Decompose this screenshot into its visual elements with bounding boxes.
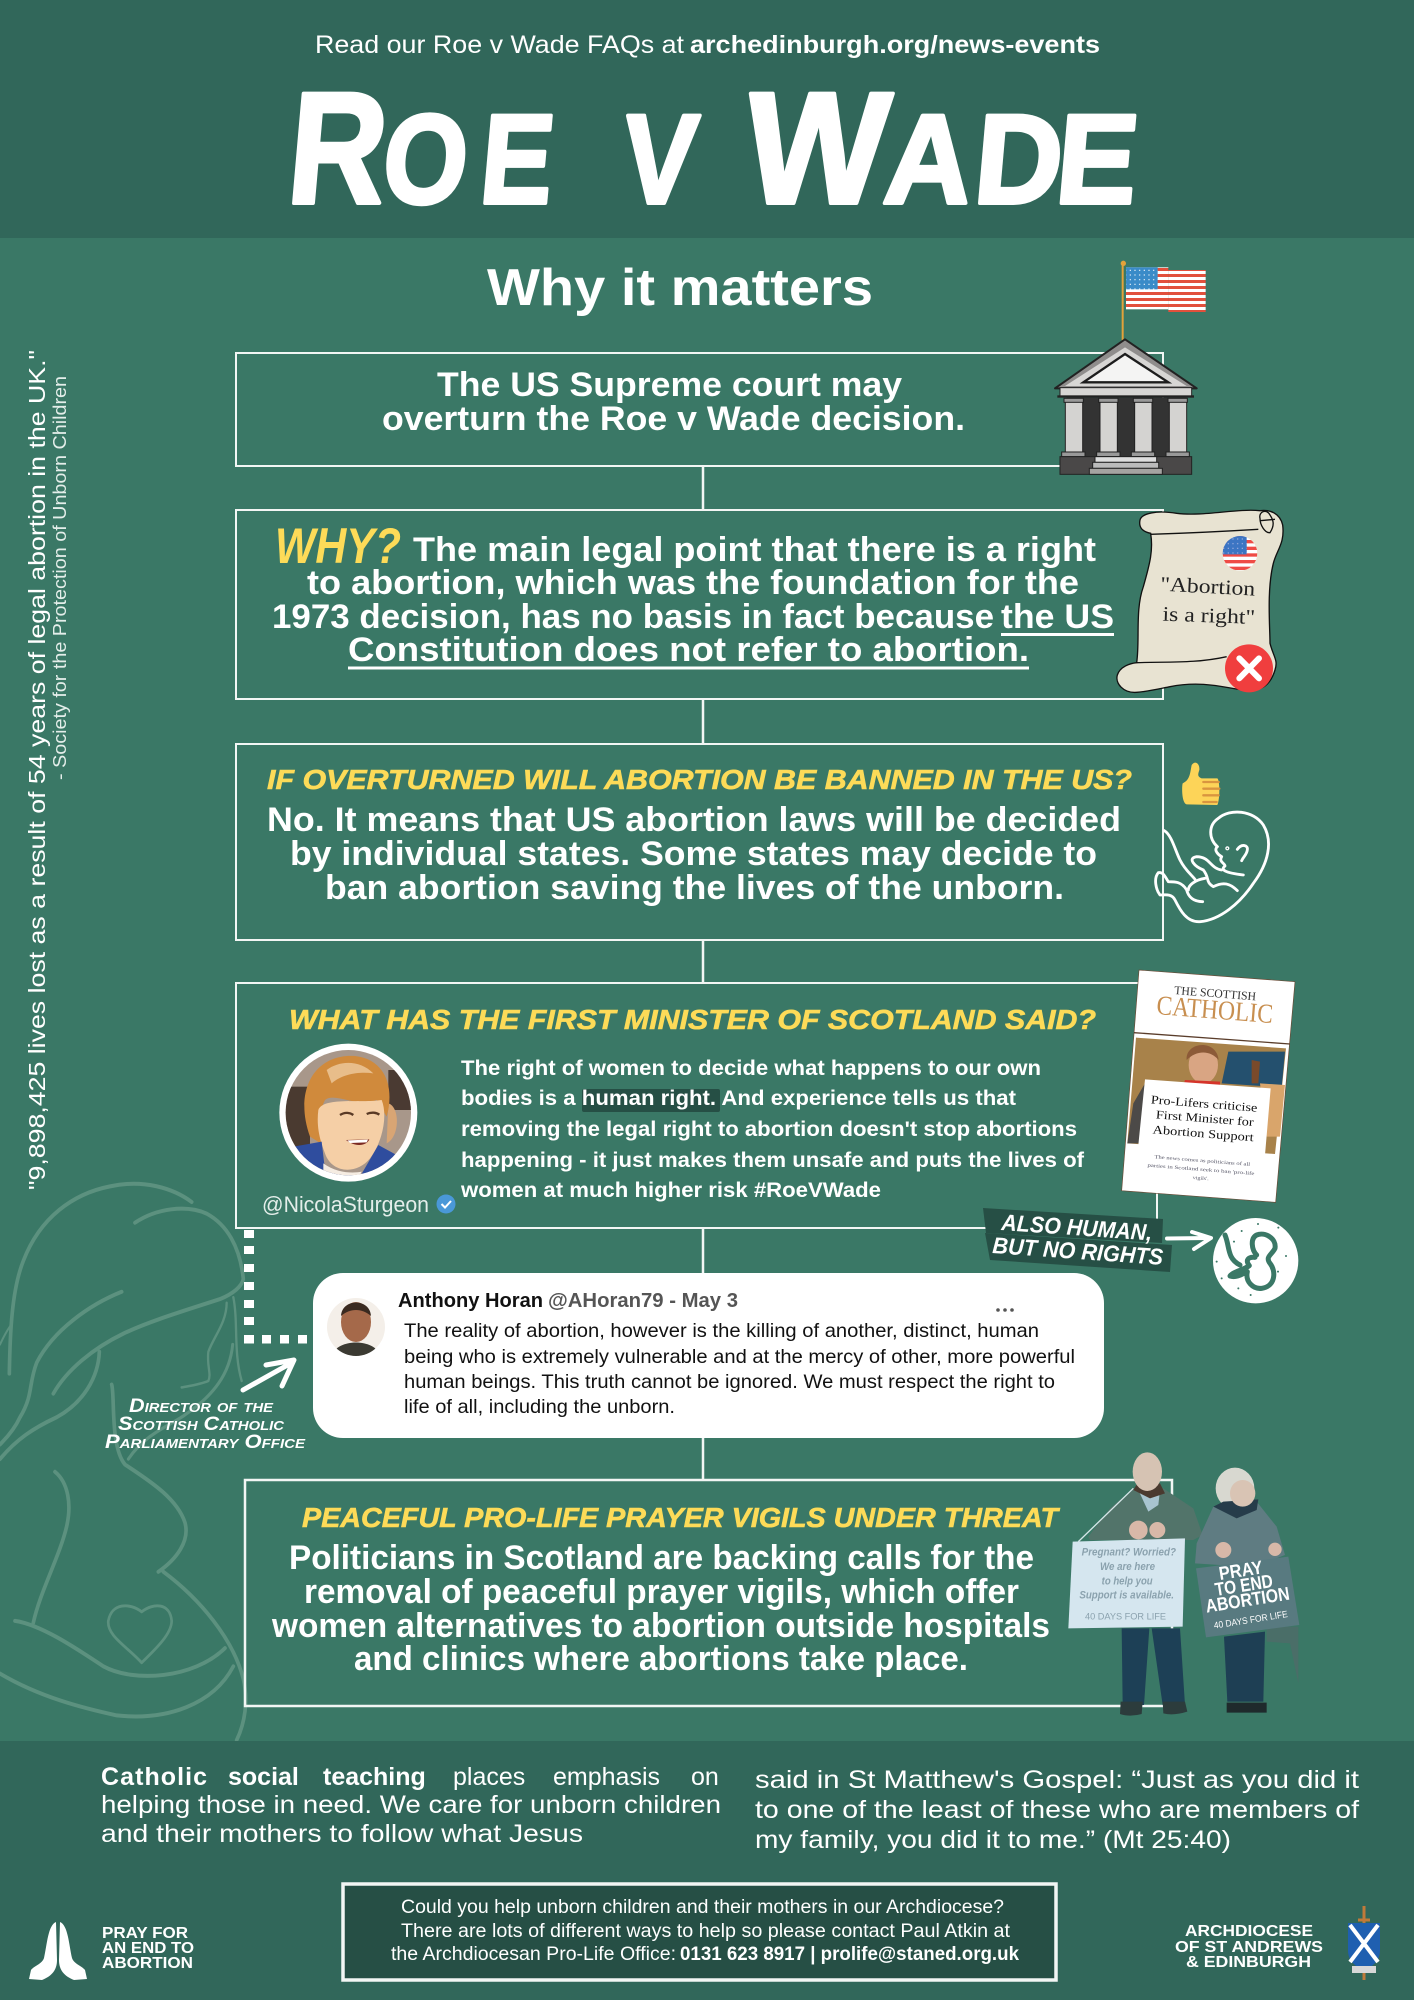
contact details: 0131 623 8917 | prolife@staned.org.uk: [680, 1944, 1019, 1965]
newspaper clipping: [1122, 970, 1295, 1202]
panel text line 1: No. It means that US abortion laws will be decided: [267, 801, 1121, 839]
contact line 3: the Archdiocesan Pro-Life Office:: [391, 1944, 676, 1965]
tweet line 1: The reality of abortion, however is the killing of another, distinct, human: [404, 1320, 1039, 1342]
sign pray line 1: PRAY: [1217, 1556, 1265, 1584]
side quote rotated: "9,898,425 lives lost as a result of 54 years of legal abortion in the UK.": [24, 350, 50, 1190]
twitter handle: @NicolaSturgeon: [262, 1192, 429, 1217]
dotted connector to tweet: [244, 1230, 307, 1344]
archdiocese line 3: & EDINBURGH: [1186, 1954, 1311, 1971]
panel text line 2: removal of peaceful prayer vigils, which offer: [304, 1573, 1019, 1611]
quote line 4: happening - it just makes them unsafe and puts the lives of: [461, 1149, 1085, 1172]
panel text line 1: The US Supreme court may: [437, 366, 902, 404]
icon: verified badge: [436, 1194, 456, 1214]
main title: [282, 59, 1147, 237]
headline line 2: First Minister for: [1155, 1107, 1254, 1129]
scroll text second line: is a right": [1162, 604, 1256, 629]
highlight: human right: [582, 1089, 720, 1112]
tweet line 2: being who is extremely vulnerable and at the mercy of other, more powerful: [404, 1346, 1075, 1368]
tweet card: Anthony Horan: [313, 1273, 1104, 1438]
photo cutout: two pro-life protesters with signs: [1068, 1452, 1299, 1716]
panel text line 4: and clinics where abortions take place.: [354, 1640, 968, 1678]
quote line 5: women at much higher risk #RoeVWade: [460, 1179, 881, 1202]
sign pray line 3: ABORTION: [1204, 1583, 1291, 1617]
caption: director title: [105, 1396, 305, 1453]
bottom band: [0, 1741, 1414, 2000]
underlines: [348, 634, 1114, 668]
article summary line 3: vigils'.: [1193, 1176, 1209, 1182]
sign text 2: We are here: [1100, 1561, 1155, 1573]
tweet menu dots: [996, 1308, 1014, 1312]
contact line 1: Could you help unborn children and their mothers in our Archdiocese?: [401, 1897, 1004, 1918]
teaching text column 1: Catholic: [101, 1763, 207, 1791]
tweet author: Anthony Horan: [398, 1290, 543, 1312]
icon: archdiocese crest: [1348, 1906, 1380, 1980]
why text line 4 underlined: Constitution does not refer to abortion.: [348, 631, 1029, 669]
archdiocese line 2: OF ST ANDREWS: [1175, 1939, 1323, 1956]
panel: why: [236, 510, 1163, 699]
headline line 1: Pro-Lifers criticise: [1150, 1092, 1258, 1115]
sign pray line 2: TO END: [1213, 1570, 1274, 1600]
pray line 2: AN END TO: [102, 1940, 194, 1957]
masthead small: THE SCOTTISH: [1174, 983, 1257, 1003]
why text line 1: The main legal point that there is a right: [413, 531, 1096, 569]
why label: WHY?: [275, 518, 401, 574]
pray line 1: PRAY FOR: [102, 1925, 188, 1942]
panel text line 2: overturn the Roe v Wade decision.: [382, 400, 965, 438]
quote line 2: bodies is a human right. And experience tells us that: [461, 1087, 1016, 1110]
tweet line 3: human beings. This truth cannot be ignored. We must respect the right to: [404, 1371, 1055, 1393]
pray line 3: ABORTION: [102, 1955, 193, 1972]
panel text line 3: women alternatives to abortion outside hospitals: [271, 1607, 1050, 1645]
archdiocese line 1: ARCHDIOCESE: [1185, 1923, 1313, 1940]
teaching text column 1: emphasis: [553, 1763, 660, 1791]
avatar: [327, 1298, 385, 1356]
callout: also human but no rights: [983, 1208, 1172, 1272]
line 2: to one of the least of these who are members of: [755, 1796, 1359, 1824]
icon: red cross badge: [1225, 644, 1273, 692]
panel: if overturned: [236, 744, 1163, 940]
teaching text column 1: [101, 1763, 721, 1848]
icon: praying hands: [29, 1922, 87, 1980]
why text underlined start: the US: [1001, 598, 1114, 636]
callout line 2: BUT NO RIGHTS: [992, 1232, 1165, 1270]
icon: courthouse with flag: [1055, 261, 1206, 474]
sign text 1: Pregnant? Worried?: [1082, 1547, 1176, 1559]
why text line 3: 1973 decision, has no basis in fact because: [272, 598, 994, 636]
connector lines: [702, 466, 704, 1480]
article summary line 2: parties in Scotland seek to ban 'pro-life: [1147, 1164, 1256, 1177]
teaching text column 1: social: [228, 1763, 299, 1791]
panel text line 2: by individual states. Some states may decide to: [290, 835, 1097, 873]
FAQ link line: Read our Roe v Wade FAQs at: [315, 31, 684, 59]
teaching text column 2: said in St Matthew's Gospel: “Just as you did it: [755, 1766, 1359, 1794]
sign logo: 40 DAYS FOR LIFE: [1085, 1611, 1166, 1621]
teaching text column 1: places: [453, 1763, 525, 1791]
article summary line 1: The news comes as politicians of all: [1154, 1155, 1251, 1168]
panel: supreme court: [236, 353, 1163, 466]
main title: ROE: [282, 60, 562, 237]
masthead large: CATHOLIC: [1156, 990, 1274, 1029]
sign text 4: Support is available.: [1079, 1590, 1174, 1602]
background silhouette: mother and child: [0, 1184, 246, 1740]
panel heading: PEACEFUL PRO-LIFE PRAYER VIGILS UNDER THREAT: [302, 1502, 1061, 1533]
panel: prayer vigils: [245, 1480, 1172, 1706]
contact box: [343, 1884, 1056, 1980]
teaching text column 2: [755, 1766, 1359, 1854]
line 3: my family, you did it to me.” (Mt 25:40): [755, 1826, 1231, 1854]
panel heading: WHAT HAS THE FIRST MINISTER OF SCOTLAND SAID?: [289, 1004, 1096, 1035]
main title: WADE: [738, 59, 1147, 237]
icon: scroll abortion is a right: [1117, 510, 1283, 692]
panel: first minister: [236, 983, 1157, 1228]
teaching text column 1: teaching: [323, 1763, 426, 1791]
caption line 2: Scottish Catholic: [118, 1414, 285, 1435]
panel text line 1: Politicians in Scotland are backing calls for the: [289, 1539, 1034, 1577]
line 3: and their mothers to follow what Jesus: [101, 1820, 583, 1848]
FAQ link url: archedinburgh.org/news-events: [690, 31, 1100, 59]
why text line 2: to abortion, which was the foundation for the: [307, 564, 1079, 602]
sign logo dark: 40 DAYS FOR LIFE: [1213, 1609, 1288, 1631]
section heading: Why it matters: [487, 259, 873, 317]
arrow to tweet: [243, 1360, 294, 1390]
icon: embryo in white circle: [1213, 1218, 1298, 1303]
quote line 3: removing the legal right to abortion doesn't stop abortions: [461, 1118, 1077, 1141]
quote line 1: The right of women to decide what happens to our own: [461, 1057, 1041, 1080]
contact line 2: There are lots of different ways to help so please contact Paul Atkin at: [401, 1921, 1011, 1942]
main title: V: [617, 89, 703, 231]
panel text line 3: ban abortion saving the lives of the unborn.: [325, 869, 1064, 907]
panel heading: IF OVERTURNED WILL ABORTION BE BANNED IN THE US?: [267, 764, 1132, 795]
side quote rotated: [24, 350, 70, 1190]
tweet handle and date: @AHoran79 - May 3: [548, 1290, 738, 1312]
headline line 3: Abortion Support: [1152, 1122, 1255, 1144]
icon: unborn baby outline: [1156, 812, 1269, 922]
teaching text column 1: on: [691, 1763, 719, 1791]
callout line 1: ALSO HUMAN,: [1000, 1209, 1153, 1246]
arrow to unborn baby: [1167, 1232, 1211, 1249]
tweet line 4: life of all, including the unborn.: [404, 1396, 675, 1418]
caption: director title: Director of the: [129, 1396, 273, 1417]
caption line 3: Parliamentary Office: [105, 1432, 305, 1453]
icon: thumbs up: [1182, 763, 1219, 805]
header band: [0, 0, 1414, 238]
sign text 3: to help you: [1102, 1575, 1153, 1587]
side quote attribution: - Society for the Protection of Unborn Children: [50, 376, 70, 780]
portrait of Nicola Sturgeon: [279, 1044, 418, 1182]
line 2: helping those in need. We care for unborn children: [101, 1791, 721, 1819]
scroll text: "Abortion: [1160, 574, 1257, 601]
